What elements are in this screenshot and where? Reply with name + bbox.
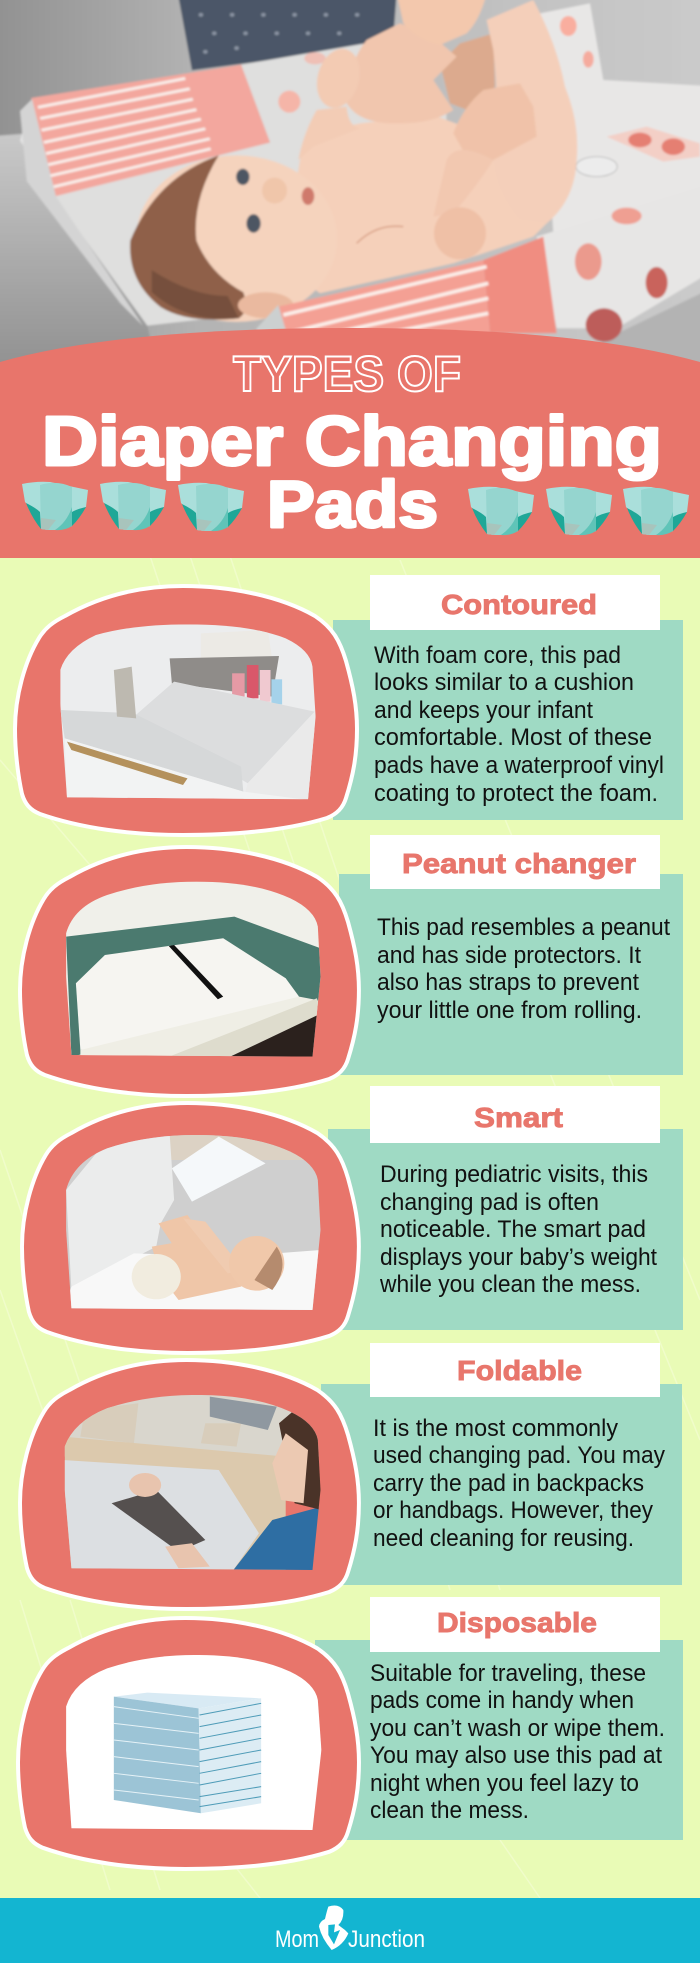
white label: contoured bbox=[370, 575, 660, 630]
text: peanut changer: and has side protectors. It bbox=[377, 942, 641, 969]
text: smart: changing pad is often bbox=[380, 1189, 599, 1216]
text: smart: displays your baby’s weight bbox=[380, 1244, 657, 1271]
text: smart: noticeable. The smart pad bbox=[380, 1216, 646, 1243]
text: foldable bbox=[373, 1415, 665, 1552]
icon: diaper 5 bbox=[546, 487, 612, 535]
blob frame: smart bbox=[22, 1103, 359, 1353]
text: contoured: and keeps your infant bbox=[374, 697, 593, 724]
text: peanut changer bbox=[377, 914, 670, 1024]
background bbox=[0, 556, 700, 1901]
icon: diaper 6 bbox=[623, 487, 689, 535]
text: peanut changer: also has straps to prevent bbox=[377, 969, 639, 996]
title banner bbox=[0, 328, 700, 558]
text: smart: while you clean the mess. bbox=[379, 1271, 641, 1298]
heading: smart: Smart bbox=[474, 1102, 563, 1133]
text: disposable: clean the mess. bbox=[370, 1797, 529, 1824]
header photo: baby on changing pad bbox=[0, 0, 700, 385]
text: contoured: comfortable. Most of these bbox=[374, 724, 652, 751]
logo: MomJunction: Mom bbox=[275, 1926, 319, 1953]
icon: diaper 1 bbox=[22, 482, 88, 530]
white label: smart bbox=[370, 1086, 660, 1143]
heading: disposable: Disposable bbox=[437, 1607, 597, 1638]
blob frame: foldable bbox=[20, 1360, 359, 1609]
text: smart bbox=[379, 1161, 657, 1298]
text: disposable: You may also use this pad at bbox=[370, 1742, 662, 1769]
text: peanut changer: This pad resembles a peanut bbox=[377, 914, 670, 941]
blob frame: contoured bbox=[15, 586, 357, 835]
icon: diaper 3 bbox=[178, 483, 244, 531]
text: contoured: With foam core, this pad bbox=[374, 642, 621, 669]
text: peanut changer: your little one from rolling. bbox=[377, 997, 642, 1024]
photo: foldable pad bbox=[64, 1395, 320, 1570]
text: foldable: carry the pad in backpacks bbox=[373, 1470, 644, 1497]
panel: contoured bbox=[15, 575, 683, 835]
text: foldable: used changing pad. You may bbox=[373, 1442, 665, 1469]
panel: peanut changer bbox=[20, 835, 683, 1096]
panel: smart bbox=[22, 1086, 683, 1353]
white label: foldable bbox=[370, 1343, 660, 1397]
text: disposable: you can’t wash or wipe them. bbox=[370, 1715, 665, 1742]
text: disposable: night when you feel lazy to bbox=[370, 1770, 639, 1797]
panel: foldable bbox=[20, 1343, 682, 1609]
text: foldable: or handbags. However, they bbox=[373, 1497, 653, 1524]
heading: contoured: Contoured bbox=[441, 589, 597, 620]
heading: peanut changer: Peanut changer bbox=[402, 848, 636, 879]
text: contoured: coating to protect the foam. bbox=[374, 780, 658, 807]
heading: types of: TYPES OF bbox=[233, 346, 461, 402]
panel: disposable bbox=[18, 1597, 683, 1869]
text: disposable: pads come in handy when bbox=[370, 1687, 634, 1714]
text: smart: During pediatric visits, this bbox=[380, 1161, 648, 1188]
icon: diaper 2 bbox=[100, 482, 166, 530]
logo: MomJunction bbox=[275, 1906, 425, 1953]
text: contoured bbox=[374, 642, 664, 807]
photo: smart pad bbox=[66, 1135, 320, 1310]
logo: MomJunction: Junction bbox=[348, 1926, 425, 1953]
heading: diaper changing: Diaper Changing bbox=[42, 402, 662, 480]
text: foldable: need cleaning for reusing. bbox=[373, 1525, 634, 1552]
text: contoured: looks similar to a cushion bbox=[374, 669, 634, 696]
pad front bolster bbox=[257, 237, 557, 333]
icon: mother and child heart bbox=[319, 1906, 348, 1950]
text: contoured: pads have a waterproof vinyl bbox=[374, 752, 664, 779]
pad right side and baby body bbox=[278, 0, 700, 342]
white label: disposable bbox=[370, 1597, 660, 1652]
photo: peanut changer pad bbox=[66, 882, 320, 1057]
baby head and hair bbox=[130, 155, 337, 322]
photo: contoured pad bbox=[60, 624, 316, 800]
footer bbox=[0, 1898, 700, 1963]
white label: peanut changer bbox=[370, 835, 660, 889]
heading: foldable: Foldable bbox=[457, 1355, 582, 1386]
text: foldable: It is the most commonly bbox=[373, 1415, 618, 1442]
photo: disposable pads bbox=[66, 1655, 322, 1830]
heading: pads: Pads bbox=[267, 467, 438, 541]
icon: diaper 4 bbox=[468, 487, 534, 535]
blob frame: peanut changer bbox=[20, 847, 359, 1096]
text: disposable bbox=[370, 1660, 665, 1824]
blob frame: disposable bbox=[18, 1618, 359, 1869]
text: disposable: Suitable for traveling, these bbox=[370, 1660, 646, 1687]
